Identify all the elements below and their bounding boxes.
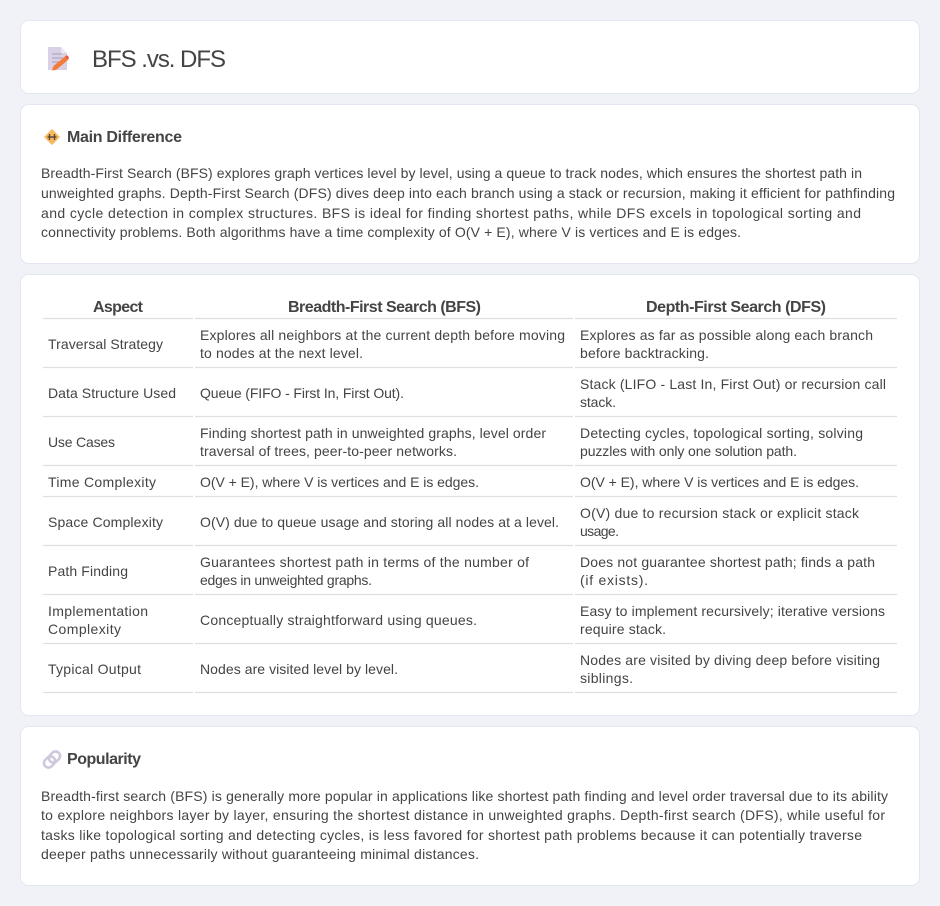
text block: main difference xyxy=(41,165,895,240)
text block: popularity xyxy=(41,788,888,862)
row: data structure used: Stack (LIFO - Last In, First Out) or recursion call xyxy=(580,376,886,392)
table header: Aspect xyxy=(93,299,144,316)
row: traversal strategy: Explores all neighbors at the current depth before moving xyxy=(200,327,565,343)
row: implementation complexity: Implementation xyxy=(48,603,148,619)
row: path finding: edges in unweighted graphs. xyxy=(200,572,372,588)
panel: popularity xyxy=(20,726,920,886)
row: traversal strategy: before backtracking. xyxy=(580,345,709,361)
table header: Depth-First Search (DFS) xyxy=(646,299,826,316)
text block: main difference: Breadth-First Search (BFS) explores graph vertices level by level, using a queue to track nodes, which ensures the shortest path in xyxy=(41,165,862,181)
row: use cases: Use Cases xyxy=(48,434,115,450)
row: implementation complexity: Conceptually straightforward using queues. xyxy=(200,612,477,628)
row: path finding: Does not guarantee shortest path; finds a path xyxy=(580,554,875,570)
row: data structure used: stack. xyxy=(580,394,616,410)
title: BFS .vs. DFS xyxy=(92,46,226,73)
row: use cases xyxy=(48,425,863,459)
row: space complexity: Space Complexity xyxy=(48,514,163,530)
row: path finding xyxy=(48,554,875,588)
row: traversal strategy: Traversal Strategy xyxy=(48,336,163,352)
heading: main difference: Main Difference xyxy=(67,129,182,146)
row: implementation complexity xyxy=(48,603,885,637)
row: use cases: traversal of trees, peer-to-peer networks. xyxy=(200,443,457,459)
row: space complexity xyxy=(48,505,860,539)
text block: popularity: to explore neighbors layer by layer, ensuring the shortest distance in unweighted graphs. Depth-first search (DFS), while useful for xyxy=(41,807,885,823)
text block: popularity: Breadth-first search (BFS) is generally more popular in applications like shortest path finding and level order traversal due to its ability xyxy=(41,788,888,804)
text block: main difference: connectivity problems. Both algorithms have a time complexity of O(V + E), where V is vertices and E is edges. xyxy=(41,224,741,240)
table header xyxy=(93,299,826,316)
row: use cases: Detecting cycles, topological sorting, solving xyxy=(580,425,863,441)
row: time complexity: O(V + E), where V is vertices and E is edges. xyxy=(200,474,479,490)
table header: Breadth-First Search (BFS) xyxy=(288,299,481,316)
row: path finding: Path Finding xyxy=(48,563,128,579)
row: data structure used xyxy=(48,376,886,410)
row: space complexity: O(V) due to queue usage and storing all nodes at a level. xyxy=(200,514,559,530)
row: time complexity xyxy=(48,474,859,490)
row: implementation complexity: require stack. xyxy=(580,621,666,637)
text block: main difference: unweighted graphs. Depth-First Search (DFS) dives deep into each branch using a stack or recursion, making it efficient for pathfinding xyxy=(41,185,895,201)
panel: comparison table xyxy=(20,274,920,716)
panel: title header xyxy=(20,20,920,94)
row: time complexity: O(V + E), where V is vertices and E is edges. xyxy=(580,474,859,490)
row: time complexity: Time Complexity xyxy=(48,474,156,490)
icon: warning diamond xyxy=(44,129,60,145)
row: traversal strategy xyxy=(48,327,873,361)
row: space complexity: usage. xyxy=(580,523,619,539)
row: use cases: puzzles with only one solution path. xyxy=(580,443,797,459)
row: implementation complexity: Easy to implement recursively; iterative versions xyxy=(580,603,885,619)
text block: main difference: and cycle detection in complex structures. BFS is ideal for finding shortest paths, while DFS excels in topological sorting and xyxy=(41,205,861,221)
row: space complexity: O(V) due to recursion stack or explicit stack xyxy=(580,505,860,521)
text block: popularity: tasks like topological sorting and detecting cycles, is less favored for shortest path problems because it can potentially traverse xyxy=(41,827,862,843)
heading: popularity: Popularity xyxy=(67,751,141,768)
row: traversal strategy: to nodes at the next level. xyxy=(200,345,363,361)
icon: document with pencil xyxy=(48,47,69,70)
row: path finding: Guarantees shortest path in terms of the number of xyxy=(200,554,529,570)
panel: main difference xyxy=(20,104,920,264)
row: data structure used: Data Structure Used xyxy=(48,385,176,401)
text block: popularity: deeper paths unnecessarily without guaranteeing minimal distances. xyxy=(41,846,479,862)
row: traversal strategy: Explores as far as possible along each branch xyxy=(580,327,873,343)
row: typical output xyxy=(48,652,880,686)
row: data structure used: Queue (FIFO - First In, First Out). xyxy=(200,385,404,401)
row: implementation complexity: Complexity xyxy=(48,621,121,637)
row: typical output: Nodes are visited by diving deep before visiting xyxy=(580,652,880,668)
row: typical output: siblings. xyxy=(580,670,633,686)
row: use cases: Finding shortest path in unweighted graphs, level order xyxy=(200,425,546,441)
icon: link xyxy=(42,750,62,769)
row: typical output: Nodes are visited level by level. xyxy=(200,661,398,677)
row: typical output: Typical Output xyxy=(48,661,141,677)
row: path finding: (if exists). xyxy=(580,572,648,588)
